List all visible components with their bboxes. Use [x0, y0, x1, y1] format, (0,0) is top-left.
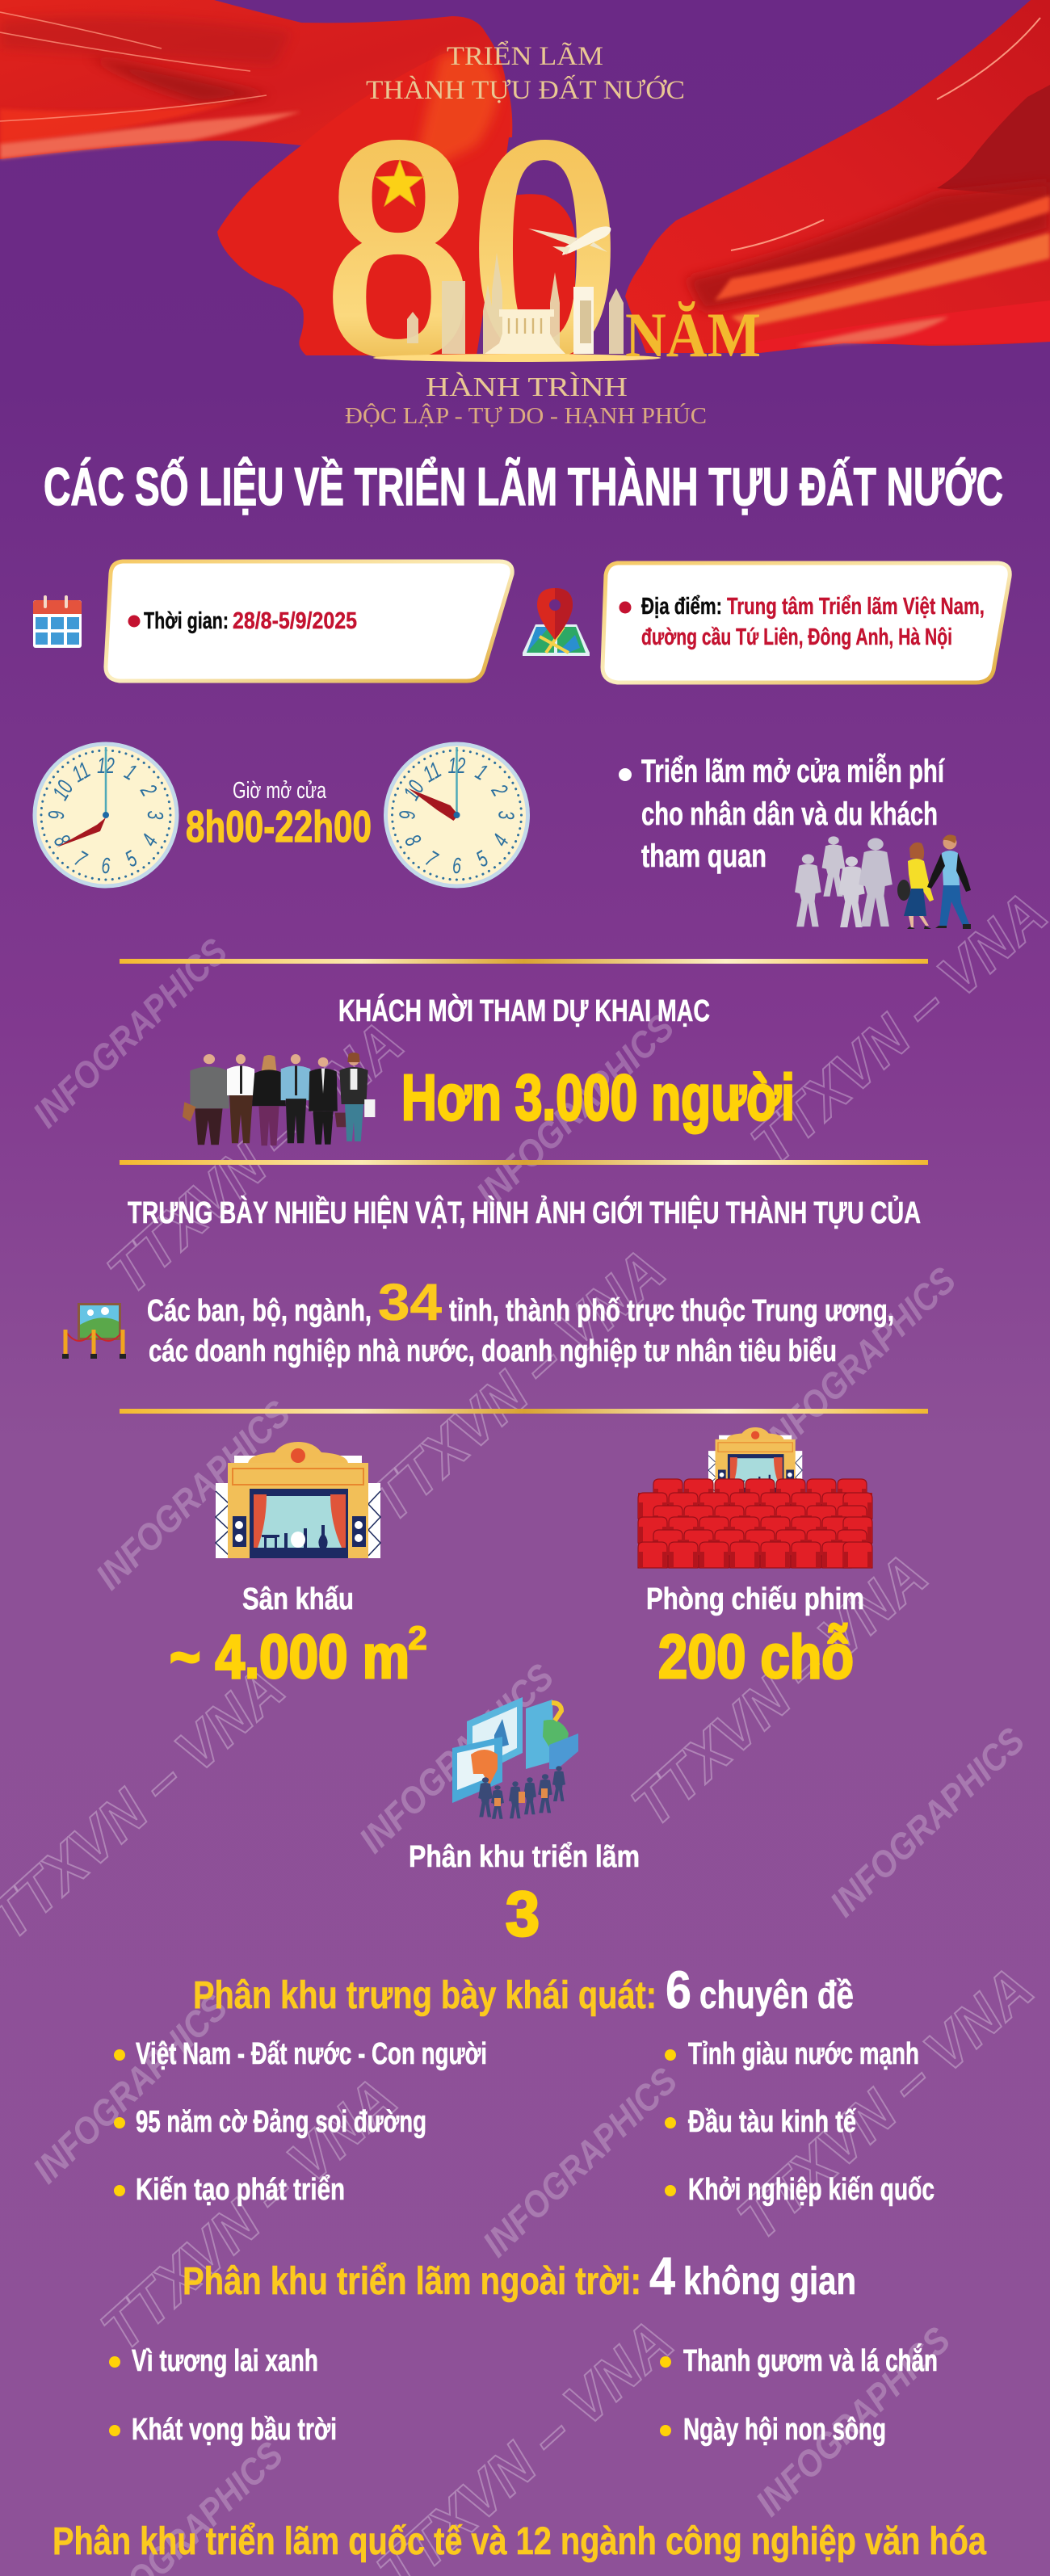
icon: clock 8h00: 9	[44, 811, 69, 819]
icon: framed picture with rope barrier	[62, 1303, 126, 1359]
stat: exhibition zones: Phân khu triển lãm	[409, 1840, 640, 1874]
list: six themes: Kiến tạo phát triển	[136, 2173, 345, 2207]
icon: clock 22h00: 10	[399, 776, 430, 805]
watermarks: INFOGRAPHICS	[822, 1719, 1032, 1925]
heading: opening guests: KHÁCH MỜI THAM DỰ KHAI MẠC	[338, 993, 710, 1028]
list: six themes	[114, 2037, 934, 2207]
panel: venue: Địa điểm:	[641, 594, 722, 620]
list: four spaces: Thanh gươm và lá chắn	[683, 2343, 938, 2378]
divider	[120, 959, 928, 964]
icon: clock 8h00: 12	[97, 754, 115, 779]
opening hours: Giờ mở cửa	[233, 778, 327, 804]
year word: NĂM	[625, 300, 761, 370]
icon: clock 8h00: 10	[48, 776, 79, 805]
watermarks: TTXVN – VNA	[724, 1954, 1046, 2253]
heading: overview zone	[193, 1960, 854, 2019]
heading: outdoor zone: không gian	[683, 2260, 856, 2303]
watermarks: INFOGRAPHICS	[88, 1392, 298, 1598]
icon: city skyline	[373, 253, 661, 362]
icon: clock 22h00: 7	[421, 847, 442, 873]
panel: time: 28/8-5/9/2025	[233, 608, 357, 634]
watermarks: INFOGRAPHICS	[475, 2059, 685, 2265]
watermarks: INFOGRAPHICS	[748, 2318, 958, 2524]
header text: journey: ĐỘC LẬP - TỰ DO - HẠNH PHÚC	[345, 404, 707, 429]
icon: clock 22h00: 8	[399, 830, 426, 851]
header text: exhibition name: THÀNH TỰU ĐẤT NƯỚC	[366, 74, 685, 105]
icon: yellow star	[376, 160, 423, 206]
exhibitors text: tỉnh, thành phố trực thuộc Trung ương,	[449, 1294, 894, 1328]
list: six themes: 95 năm cờ Đảng soi đường	[136, 2105, 426, 2139]
stat: cinema: Phòng chiếu phim	[646, 1582, 864, 1616]
list: six themes: Tỉnh giàu nước mạnh	[688, 2037, 919, 2071]
icon: clock 8h00: 6	[102, 854, 111, 879]
panel: time: Thời gian:	[144, 608, 229, 634]
icon: clock 22h00: 5	[472, 846, 493, 872]
icon: clock 8h00: 4	[137, 830, 163, 851]
divider	[120, 1409, 928, 1414]
logo: 80 years: 80	[326, 73, 618, 420]
header text: journey: HÀNH TRÌNH	[426, 372, 628, 402]
icon: stage	[216, 1442, 380, 1558]
watermarks: INFOGRAPHICS	[351, 1655, 561, 1861]
icon: clock 22h00: 11	[419, 758, 446, 788]
header text: exhibition name	[366, 40, 685, 105]
heading: overview zone: 6	[666, 1960, 691, 2019]
exhibitors text: Các ban, bộ, ngành,	[147, 1294, 372, 1328]
icon: cinema seats	[638, 1427, 872, 1568]
list: four spaces: Khát vọng bầu trời	[132, 2413, 337, 2447]
watermarks	[0, 879, 1050, 2576]
icon: clock 8h00	[35, 744, 177, 886]
opening hours: 8h00-22h00	[186, 801, 372, 851]
watermarks: TTXVN – VNA	[88, 2065, 410, 2364]
icon: clock 22h00: 1	[471, 759, 491, 786]
icon: guests group	[183, 1053, 375, 1145]
icon: clock 8h00: 7	[70, 847, 91, 873]
icon: clock 8h00: 11	[68, 758, 94, 788]
heading: outdoor zone	[183, 2246, 856, 2305]
icon: map pin	[523, 588, 590, 656]
heading: outdoor zone: Phân khu triển lãm ngoài trời:	[183, 2260, 641, 2303]
watermarks: TTXVN – VNA	[356, 1236, 678, 1535]
icon: clock 22h00: 12	[448, 754, 466, 779]
icon: airplane	[528, 226, 611, 255]
free admission note	[619, 752, 945, 874]
watermarks: TTXVN – VNA	[94, 1008, 416, 1307]
exhibitors text	[147, 1273, 894, 1368]
icon: clock 22h00: 3	[494, 811, 519, 820]
watermarks: INFOGRAPHICS	[25, 1986, 235, 2191]
panel: venue	[603, 563, 1010, 683]
free admission note: tham quan	[641, 838, 766, 874]
list: six themes: Việt Nam - Đất nước - Con người	[136, 2037, 487, 2071]
icon: visitors walking	[795, 834, 971, 929]
stat: stage	[170, 1582, 427, 1691]
icon: clock 8h00: 2	[135, 780, 162, 801]
icon: clock 22h00: 9	[395, 811, 420, 819]
free admission note: Triển lãm mở cửa miễn phí	[641, 752, 945, 789]
exhibitors text: các doanh nghiệp nhà nước, doanh nghiệp tư nhân tiêu biểu	[149, 1334, 837, 1368]
header text: exhibition name: TRIỂN LÃM	[447, 40, 603, 71]
watermarks: TTXVN – VNA	[619, 1540, 940, 1839]
list: four spaces: Vì tương lai xanh	[132, 2344, 318, 2378]
divider	[120, 1160, 928, 1165]
header text: journey	[345, 372, 707, 429]
ribbon: left and centre	[0, 0, 575, 355]
icon: calendar	[33, 597, 82, 648]
icon: clock 8h00: 1	[120, 759, 141, 786]
list: six themes: Đầu tàu kinh tế	[688, 2105, 857, 2139]
icon: clock 22h00: 2	[485, 780, 513, 801]
free admission note: cho nhân dân và du khách	[641, 796, 938, 832]
ribbon: right	[625, 0, 1050, 353]
stat: stage: 2	[408, 1619, 427, 1657]
list: four spaces	[109, 2343, 938, 2447]
watermarks: INFOGRAPHICS	[754, 1259, 964, 1464]
icon: clock 22h00	[386, 744, 528, 886]
icon: exhibition zones	[452, 1697, 578, 1819]
watermarks: INFOGRAPHICS	[468, 1006, 682, 1215]
stat: cinema	[646, 1582, 864, 1691]
icon: clock 8h00: 8	[48, 830, 75, 851]
icon: clock 22h00: 4	[488, 830, 514, 851]
heading: overview zone: Phân khu trưng bày khái quát:	[193, 1974, 657, 2017]
stat: guests: Hơn 3.000 người	[401, 1061, 795, 1133]
icon: clock 22h00: 6	[452, 854, 461, 879]
stat: cinema: 200 chỗ	[658, 1623, 854, 1691]
stat: stage: Sân khấu	[242, 1582, 354, 1616]
icon: clock 8h00: 3	[142, 811, 167, 820]
opening hours	[186, 778, 372, 851]
list: six themes: Khởi nghiệp kiến quốc	[688, 2173, 934, 2207]
list: four spaces: Ngày hội non sông	[683, 2413, 886, 2447]
watermarks: INFOGRAPHICS	[25, 930, 235, 1136]
stat: stage: ~ 4.000 m	[170, 1623, 410, 1691]
icon: clock 8h00: 5	[121, 846, 142, 872]
stat: exhibition zones	[409, 1840, 640, 1949]
panel: time	[106, 561, 512, 681]
stat: exhibition zones: 3	[506, 1878, 540, 1949]
heading: outdoor zone: 4	[649, 2246, 675, 2305]
exhibitors text: 34	[378, 1273, 442, 1331]
heading: overview zone: chuyên đề	[699, 1974, 854, 2017]
